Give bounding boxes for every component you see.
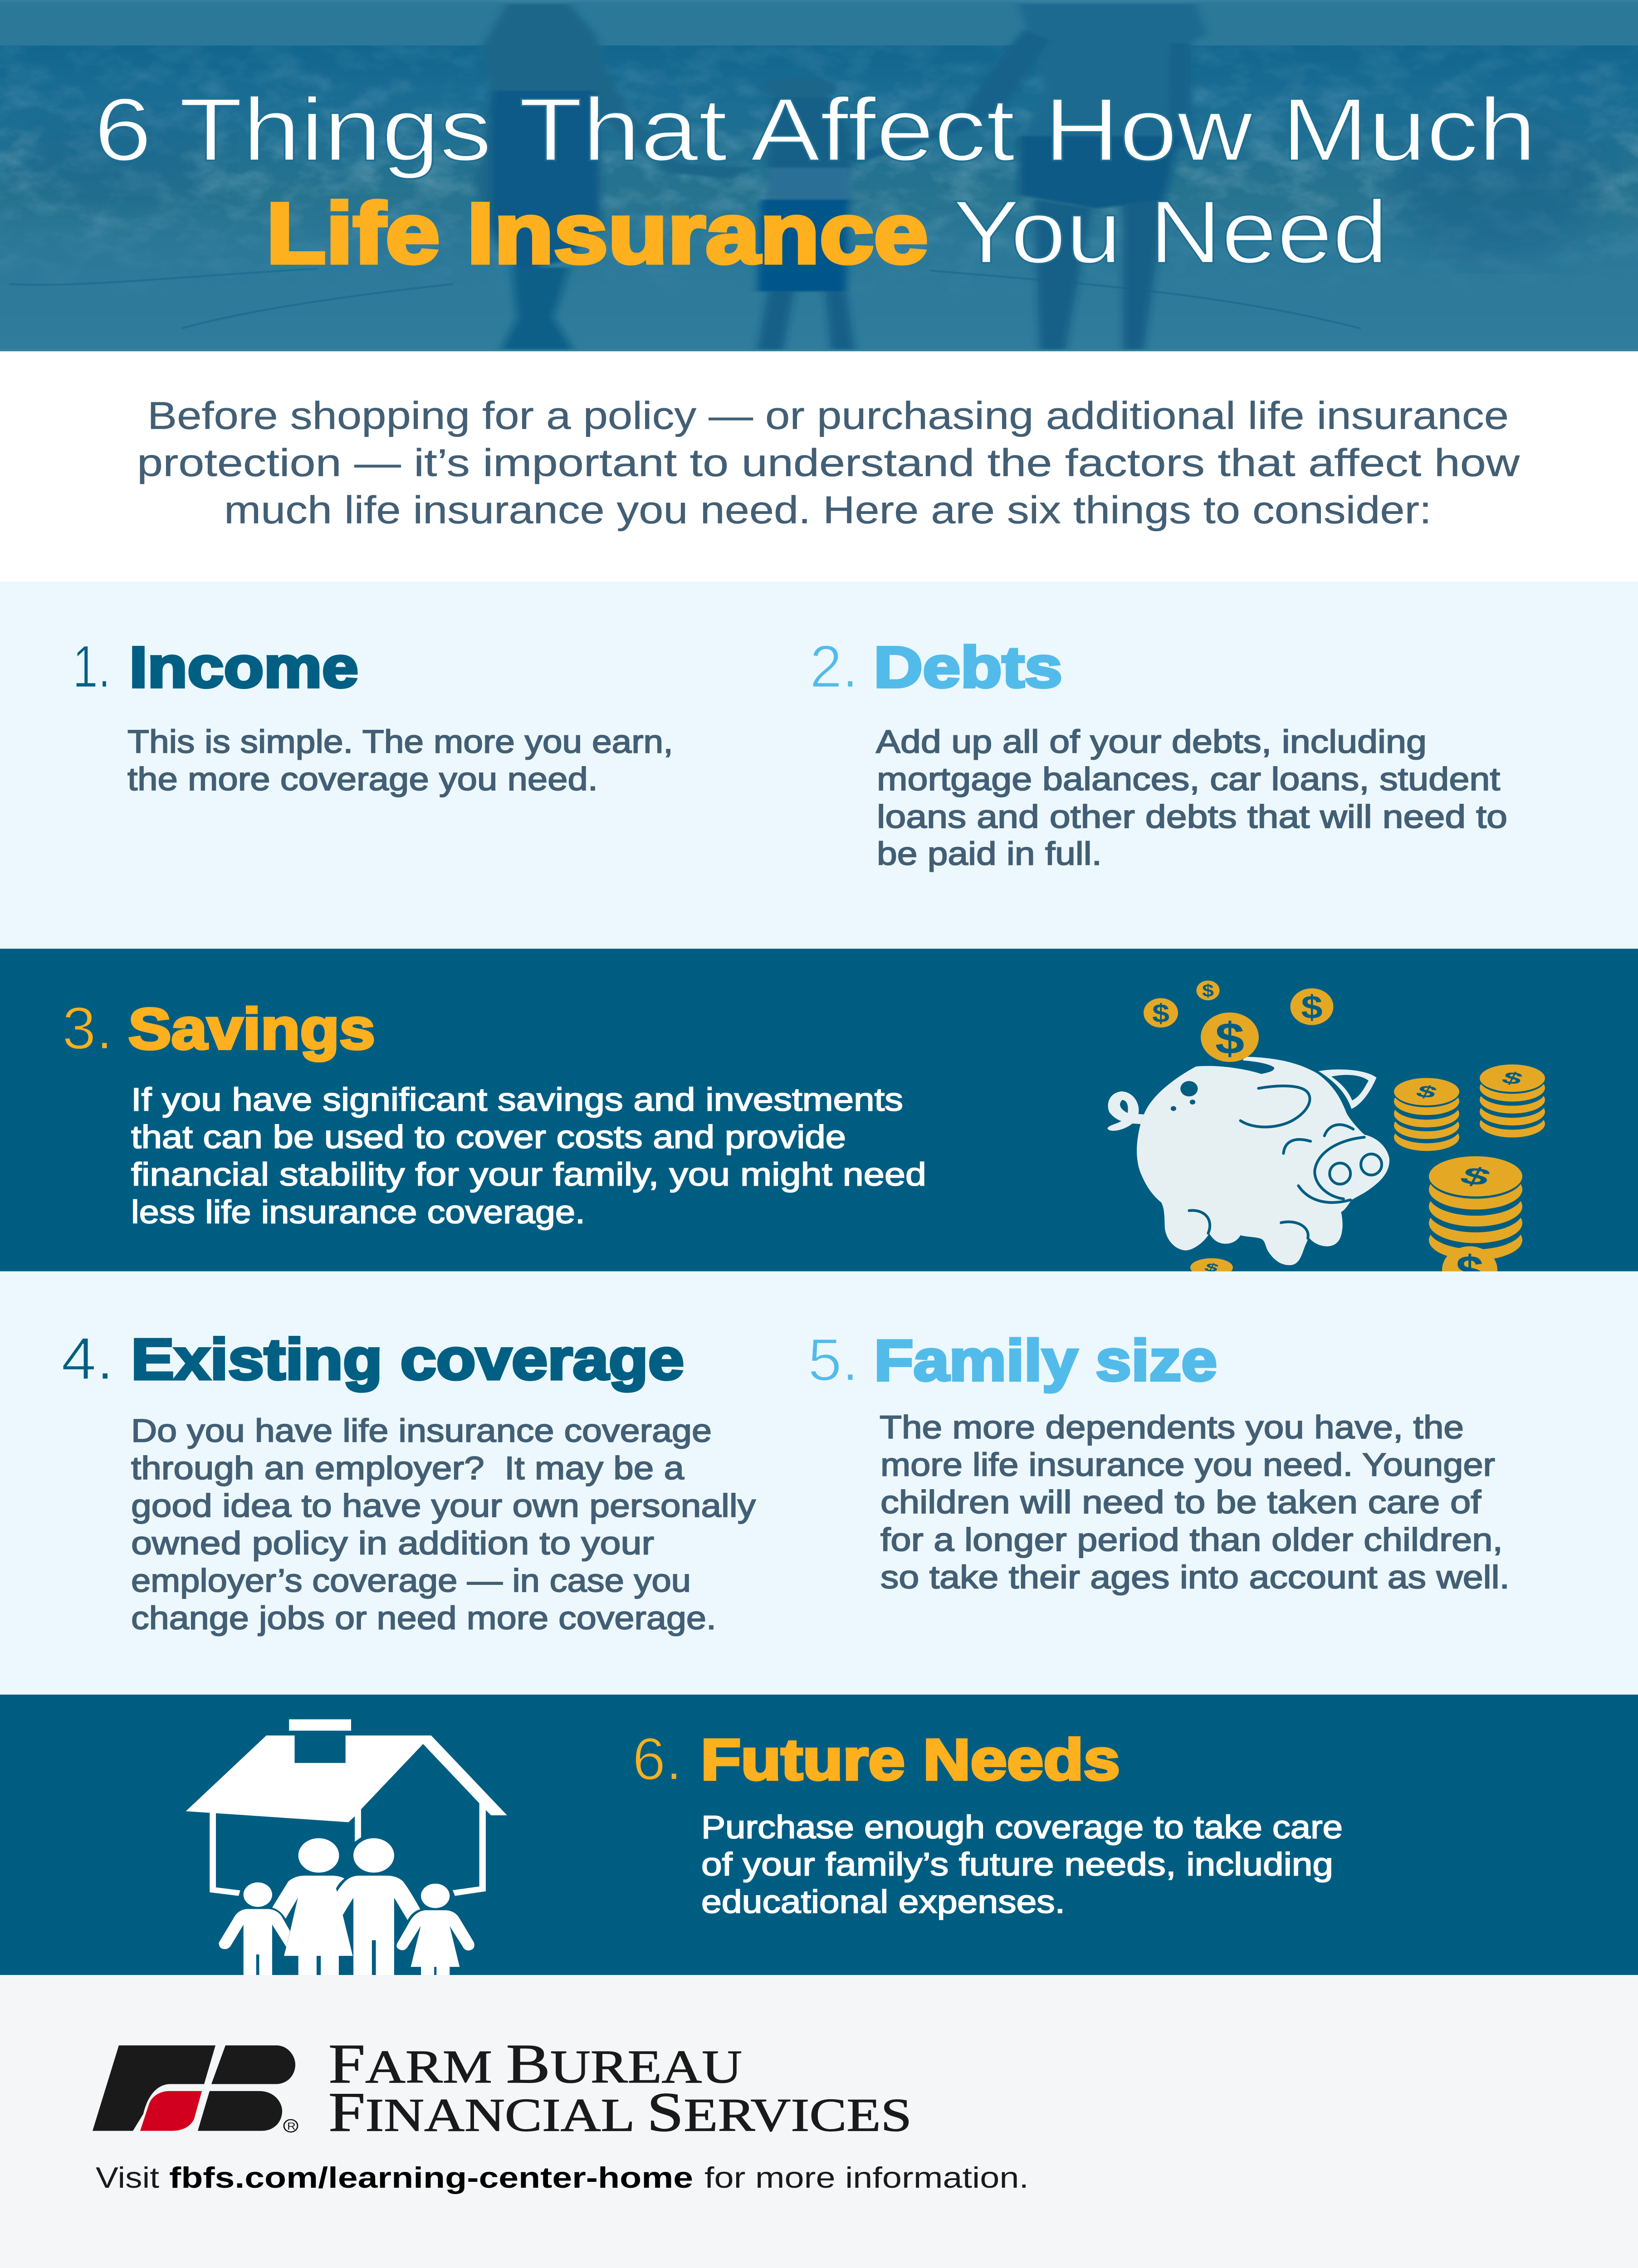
- section 3 heading: [65, 1005, 374, 1062]
- intro text: much life insurance you need. Here are six things to consider:: [224, 488, 1432, 532]
- section 2: debts: [810, 633, 1507, 872]
- icon: large coin stack: $: [1455, 1162, 1496, 1191]
- icon: small coin at bottom: [1190, 1258, 1233, 1277]
- icon: coin stack right: [1480, 1065, 1545, 1138]
- title: Life Insurance: [266, 185, 928, 281]
- intro text: [137, 394, 1520, 532]
- section 3 text: that can be used to cover costs and provide: [131, 1119, 846, 1155]
- section 2: debts: mortgage balances, car loans, student: [877, 761, 1500, 797]
- section 4: existing coverage: through an employer? It may be a: [131, 1450, 685, 1486]
- section 2: debts: 2.: [810, 633, 858, 700]
- icon: large coin stack: $: [1456, 1246, 1484, 1295]
- panel: savings: [0, 948, 1638, 1295]
- section 3 heading: 3.: [62, 995, 113, 1062]
- panel: existing coverage and family size: [0, 1271, 1638, 1695]
- section 4: existing coverage: Do you have life insurance coverage: [131, 1412, 712, 1449]
- section 4: existing coverage: change jobs or need more coverage.: [131, 1600, 716, 1636]
- icon: coin stack left: [1394, 1078, 1459, 1151]
- section 5: family size: The more dependents you have, the: [880, 1409, 1464, 1445]
- section 3 text: financial stability for your family, you might need: [131, 1156, 926, 1193]
- logo mark: R: [287, 2121, 296, 2132]
- panel: header photo with title: [0, 0, 1638, 351]
- logo wordmark: [328, 2033, 912, 2143]
- section 4: existing coverage: good idea to have your own personally: [131, 1487, 756, 1524]
- icon: falling coins: $: [1152, 999, 1169, 1028]
- section 1: income: This is simple. The more you earn,: [127, 723, 673, 760]
- footer link text: Visit: [96, 2161, 159, 2194]
- icon: coin entering slot: [1201, 1012, 1259, 1063]
- section 5: family size: so take their ages into account as well.: [880, 1559, 1510, 1595]
- section 1: income: 1.: [73, 633, 111, 700]
- photo: family silhouettes: [475, 4, 1207, 349]
- section 5: family size: children will need to be taken care of: [880, 1484, 1481, 1520]
- section 2: debts: Debts: [874, 635, 1062, 699]
- panel: income and debts: [0, 582, 1638, 948]
- section 4: existing coverage: Existing coverage: [131, 1327, 684, 1392]
- icon: family under house: [186, 1719, 507, 1981]
- section 5: family size: Family size: [874, 1328, 1217, 1393]
- section 5: family size: 5.: [808, 1326, 859, 1393]
- section 1: income: the more coverage you need.: [127, 761, 598, 797]
- section 4: existing coverage: 4.: [61, 1325, 114, 1392]
- icon: coin entering slot: $: [1215, 1013, 1244, 1063]
- section 1: income: [73, 633, 673, 797]
- title: 6 Things That Affect How Much: [94, 80, 1536, 180]
- icon: coin stack left: $: [1413, 1081, 1441, 1102]
- section 6 heading: Future Needs: [701, 1727, 1120, 1792]
- section 6 text: educational expenses.: [701, 1883, 1065, 1920]
- footer link text: [96, 2161, 1029, 2194]
- logo wordmark: FARM BUREAU: [328, 2033, 742, 2095]
- section 4: existing coverage: employer’s coverage — in case you: [131, 1562, 691, 1599]
- intro text: protection — it’s important to understand the factors that affect how: [137, 441, 1520, 484]
- section 4: existing coverage: [61, 1325, 756, 1636]
- icon: small coin at bottom: $: [1202, 1261, 1222, 1275]
- logo wordmark: FINANCIAL SERVICES: [328, 2081, 912, 2143]
- section 3 text: If you have significant savings and investments: [131, 1081, 903, 1118]
- section 2: debts: loans and other debts that will need to: [877, 798, 1507, 835]
- section 6 heading: 6.: [632, 1725, 682, 1793]
- icon: large coin stack: [1429, 1156, 1522, 1295]
- section 3 text: [131, 1081, 926, 1230]
- section 5: family size: more life insurance you need. Younger: [880, 1446, 1495, 1483]
- panel: footer: [0, 1975, 1638, 2268]
- icon: piggy bank: [1108, 1057, 1389, 1265]
- panel: future needs: [0, 1695, 1638, 1981]
- intro text: Before shopping for a policy — or purchasing additional life insurance: [147, 394, 1509, 437]
- section 6 text: Purchase enough coverage to take care: [701, 1809, 1343, 1845]
- section 6 text: of your family’s future needs, including: [701, 1846, 1333, 1882]
- section 5: family size: [808, 1326, 1510, 1595]
- footer link text: fbfs.com/learning-center-home: [169, 2161, 693, 2194]
- icon: falling coins: $: [1202, 981, 1214, 1001]
- title: [100, 95, 1529, 266]
- footer link text: for more information.: [704, 2161, 1029, 2194]
- icon: falling coins: $: [1301, 989, 1323, 1025]
- logo mark: [93, 2045, 298, 2132]
- section 6 text: [701, 1809, 1343, 1920]
- section 1: income: Income: [129, 635, 358, 699]
- icon: coin stack right: $: [1498, 1068, 1526, 1088]
- section 3 text: less life insurance coverage.: [131, 1193, 585, 1230]
- section 3 heading: Savings: [128, 997, 375, 1061]
- section 2: debts: Add up all of your debts, including: [876, 723, 1427, 760]
- icon: falling coins: [1144, 981, 1334, 1028]
- section 5: family size: for a longer period than older children,: [880, 1521, 1503, 1558]
- section 4: existing coverage: owned policy in addition to your: [131, 1525, 654, 1561]
- title: You Need: [953, 182, 1388, 282]
- section 2: debts: be paid in full.: [877, 836, 1102, 872]
